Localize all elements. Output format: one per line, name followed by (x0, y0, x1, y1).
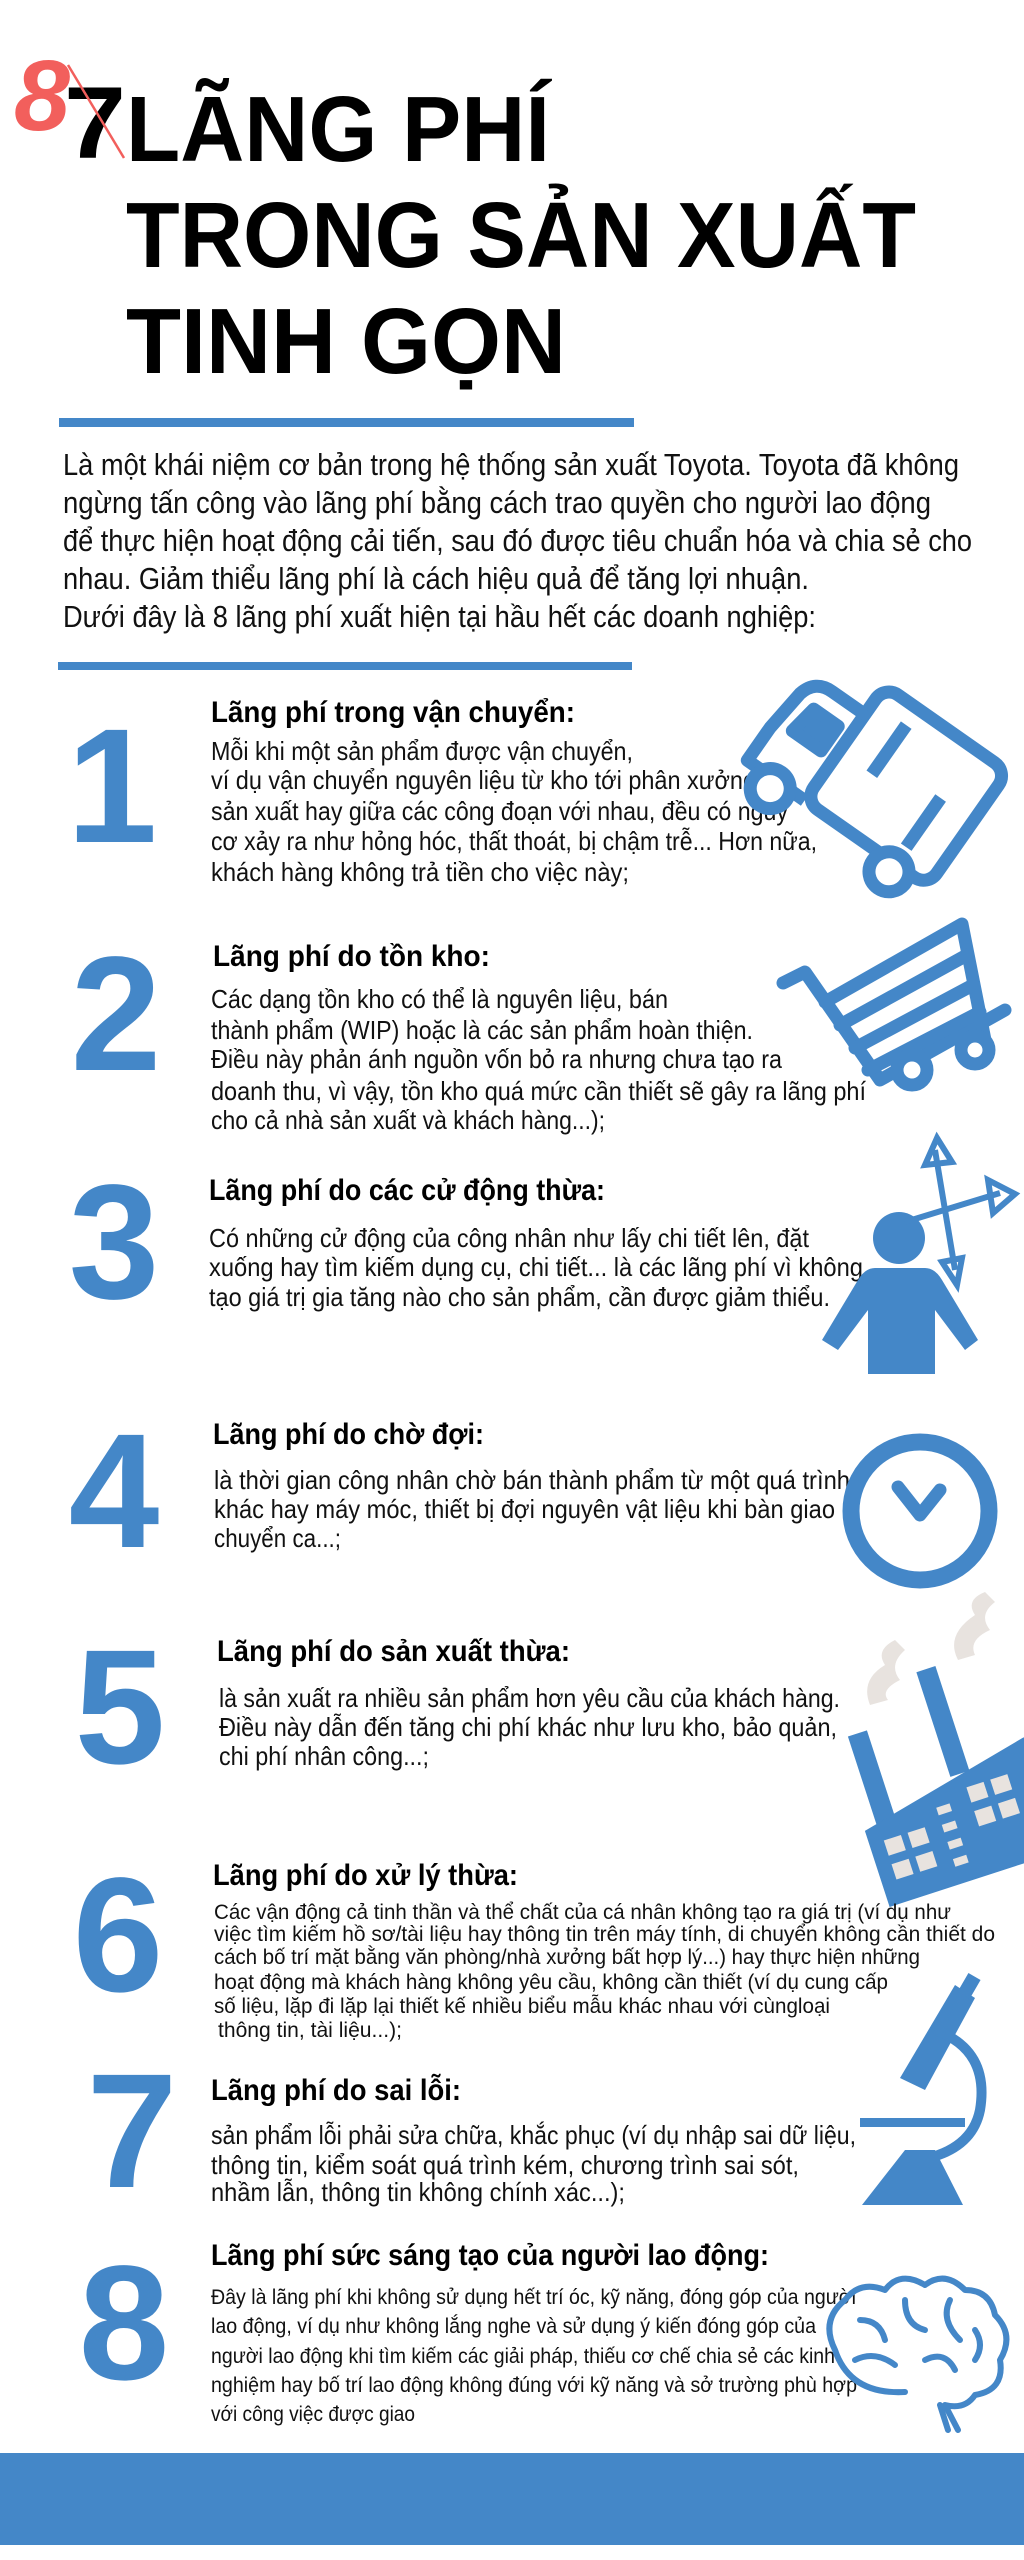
section 3: Có những cử động của công nhân như lấy chi tiết lên, đặt (209, 1223, 810, 1253)
section 8: người lao động khi tìm kiếm các giải pháp, thiếu cơ chế chia sẻ các kinh (211, 2345, 835, 2368)
icon: brain (829, 2279, 1006, 2430)
title: 7 (64, 66, 126, 180)
section 1: ví dụ vận chuyển nguyên liệu từ kho tới phân xưởng (211, 765, 756, 795)
section 2: cho cả nhà sản xuất và khách hàng...); (211, 1105, 605, 1135)
section 2: doanh thu, vì vậy, tồn kho quá mức cần thiết sẽ gây ra lãng phí (211, 1076, 867, 1106)
section 7: nhầm lẫn, thông tin không chính xác...); (211, 2177, 625, 2207)
section 6: Các vận động cả tinh thần và thể chất của cá nhân không tạo ra giá trị (ví dụ như (214, 1901, 951, 1924)
section 4: Lãng phí do chờ đợi: (213, 1418, 484, 1451)
section 2: 2 (71, 922, 161, 1105)
section 1: cơ xảy ra như hỏng hóc, thất thoát, bị chậm trễ... Hơn nữa, (211, 826, 817, 856)
section 2: Các dạng tồn kho có thể là nguyên liệu, bán (211, 984, 668, 1014)
section 7 (87, 2039, 856, 2222)
section 1 (67, 646, 1008, 911)
section 1: 1 (67, 694, 157, 877)
section 6: cách bố trí mặt bằng văn phòng/nhà xưởng bất hợp lý...) hay thực hiện những (214, 1946, 920, 1969)
section 6: Lãng phí do xử lý thừa: (213, 1859, 518, 1892)
section 5: Điều này dẫn đến tăng chi phí khác như lưu kho, bảo quản, (219, 1712, 837, 1742)
intro text: Dưới đây là 8 lãng phí xuất hiện tại hầu hết các doanh nghiệp: (63, 599, 816, 634)
section 1: Mỗi khi một sản phẩm được vận chuyển, (211, 736, 633, 766)
title: LÃNG PHÍ (126, 77, 552, 181)
section 5: chi phí nhân công...; (219, 1741, 429, 1771)
intro text: nhau. Giảm thiểu lãng phí là cách hiệu quả để tăng lợi nhuận. (63, 561, 809, 596)
section 1: Lãng phí trong vận chuyển: (211, 696, 575, 729)
icon: factory (823, 1592, 1024, 1907)
section 5: là sản xuất ra nhiều sản phẩm hơn yêu cầu của khách hàng. (219, 1683, 840, 1713)
section 4: là thời gian công nhân chờ bán thành phẩm từ một quá trình (214, 1465, 850, 1495)
section 6: thông tin, tài liệu...); (218, 2019, 402, 2042)
section 8: 8 (79, 2231, 169, 2414)
section 2 (71, 922, 1005, 1135)
section 6 (73, 1843, 995, 2205)
section 3 (69, 1138, 1015, 1374)
section 7: thông tin, kiểm soát quá trình kém, chương trình sai sót, (211, 2150, 799, 2180)
section 5: 5 (75, 1615, 165, 1798)
section 8: nghiệm hay bố trí lao động không đúng với kỹ năng và sở trường phù hợp (211, 2374, 857, 2397)
section 3: xuống hay tìm kiếm dụng cụ, chi tiết... là các lãng phí vì không (209, 1252, 863, 1282)
section 8: Đây là lãng phí khi không sử dụng hết trí óc, kỹ năng, đóng góp của người (211, 2286, 856, 2309)
icon: microscope (860, 1973, 982, 2205)
section 7: Lãng phí do sai lỗi: (211, 2073, 461, 2107)
section 3: tạo giá trị gia tăng nào cho sản phẩm, cần được giảm thiểu. (209, 1282, 830, 1312)
title: 8 (14, 40, 70, 152)
title: TRONG SẢN XUẤT (126, 183, 916, 287)
title (14, 40, 916, 393)
section 8 (79, 2231, 1006, 2430)
section 7: sản phẩm lỗi phải sửa chữa, khắc phục (ví dụ nhập sai dữ liệu, (211, 2120, 856, 2150)
icon: truck (730, 646, 1008, 911)
title: TINH GỌN (126, 289, 566, 393)
section 4: 4 (69, 1399, 159, 1582)
section 6: hoạt động mà khách hàng không yêu cầu, không cần thiết (ví dụ cung cấp (214, 1971, 888, 1994)
section 8: Lãng phí sức sáng tạo của người lao động: (211, 2239, 769, 2272)
icon: clock (851, 1442, 989, 1580)
intro text: ngừng tấn công vào lãng phí bằng cách trao quyền cho người lao động (63, 485, 931, 520)
section 2: thành phẩm (WIP) hoặc là các sản phẩm hoàn thiện. (211, 1015, 753, 1045)
section 3: Lãng phí do các cử động thừa: (209, 1174, 605, 1207)
section 6: số liệu, lặp đi lặp lại thiết kế nhiều biểu mẫu khác nhau với cùngloại (214, 1995, 830, 2018)
section 1: khách hàng không trả tiền cho việc này; (211, 857, 629, 887)
section 4: chuyển ca...; (214, 1523, 341, 1553)
section 2: Lãng phí do tồn kho: (213, 940, 490, 973)
section 8: với công việc được giao (211, 2403, 415, 2426)
section 6: 6 (73, 1843, 163, 2026)
icon: person with arrows (822, 1138, 1015, 1374)
section 3: 3 (69, 1150, 159, 1333)
footer band (0, 2453, 1024, 2545)
intro text (63, 447, 972, 634)
section 4: khác hay máy móc, thiết bị đợi nguyên vật liệu khi bàn giao (214, 1494, 835, 1524)
section 5: Lãng phí do sản xuất thừa: (217, 1635, 570, 1668)
section 2: Điều này phản ánh nguồn vốn bỏ ra nhưng chưa tạo ra (211, 1044, 782, 1074)
icon: shopping cart (783, 924, 1005, 1085)
section 6: việc tìm kiếm hồ sơ/tài liệu hay thông tin trên máy tính, di chuyển không cần thiết do (214, 1923, 995, 1946)
section 1: sản xuất hay giữa các công đoạn với nhau, đều có nguy (211, 796, 788, 826)
section 8: lao động, ví dụ như không lắng nghe và sử dụng ý kiến đóng góp của (211, 2315, 816, 2338)
section 5 (75, 1592, 1024, 1907)
section 7: 7 (87, 2039, 177, 2222)
section 4 (69, 1399, 989, 1582)
